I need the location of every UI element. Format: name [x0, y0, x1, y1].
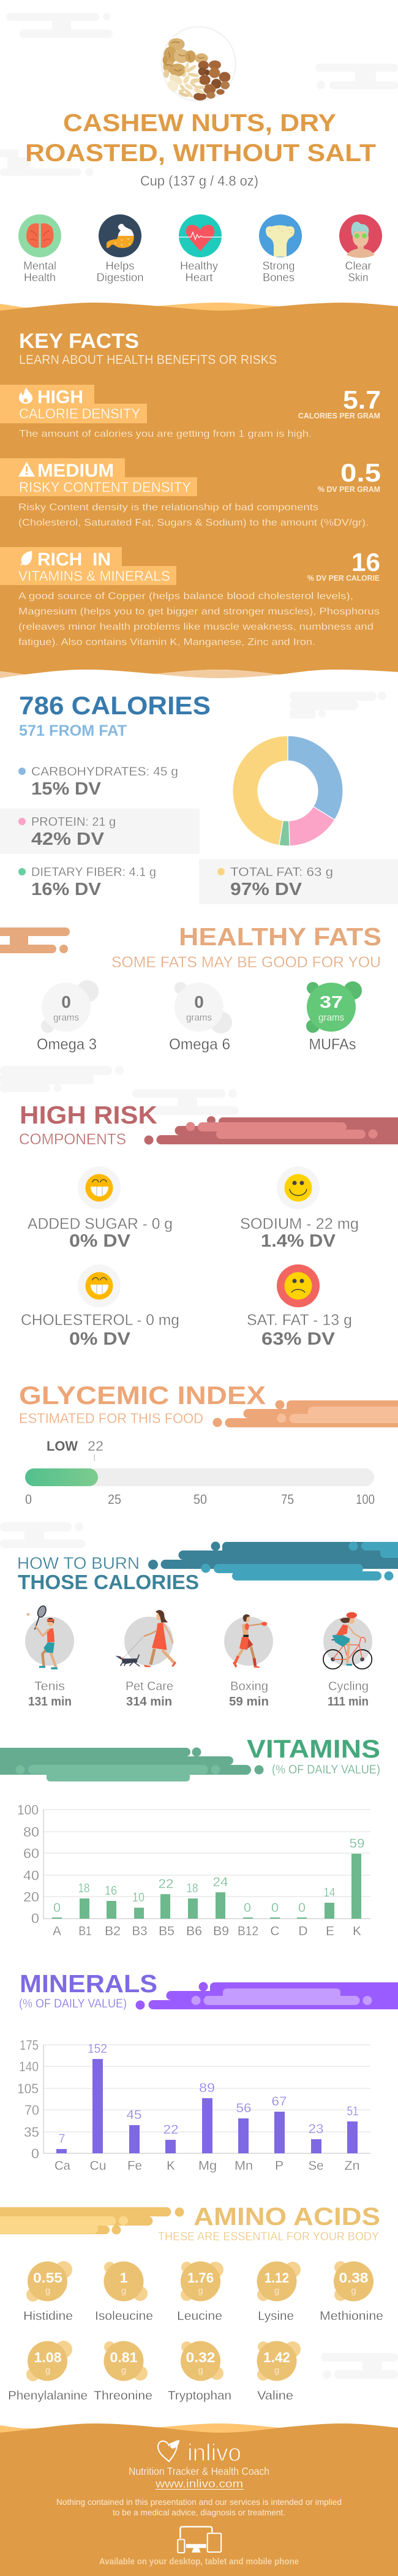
activity: boxing: [224, 1614, 273, 1709]
amino: threonine: [94, 2341, 152, 2403]
axis labels: [17, 1802, 39, 1926]
disclaimer: to be a medical advice, diagnosis or treatment.: [113, 2507, 285, 2517]
decorative clouds: high risk: [0, 1066, 239, 1115]
fact: rich in vitamins and minerals: A good source of Copper (helps balance blood cholesterol levels),: [18, 591, 353, 602]
fact: medium risky content density: MEDIUM: [37, 461, 114, 481]
panel: amino acids: [0, 2202, 383, 2403]
icon: mental health: Health: [24, 271, 56, 284]
panel: health benefits: [18, 214, 382, 284]
badge: MUFAs: [306, 981, 362, 1053]
badge: MUFAs: 37: [320, 992, 343, 1011]
value labels: 0: [244, 1901, 251, 1915]
legend: carbohydrates: 15% DV: [31, 779, 102, 799]
fact: high calorie density: 5.7: [343, 385, 381, 414]
axis labels: 35: [24, 2125, 39, 2140]
subheading: ESTIMATED FOR THIS FOOD: [19, 1410, 203, 1426]
category labels: K: [353, 1924, 361, 1938]
activity: cycling: [323, 1612, 372, 1709]
category labels: Fe: [127, 2159, 142, 2173]
cashews: [165, 73, 184, 94]
activity: boxing: Boxing: [230, 1680, 268, 1693]
fact: high calorie density: CALORIES PER GRAM: [298, 412, 380, 420]
category labels: B2: [105, 1924, 121, 1938]
amino: phenylalanine: [8, 2341, 88, 2403]
amino: histidine: 0.55: [33, 2270, 62, 2286]
icon: strong bones: Bones: [263, 271, 295, 284]
gauge axis: [25, 1492, 375, 1507]
disclaimer: Nothing contained in this presentation and our services is intended or implied: [56, 2497, 342, 2507]
value labels: 56: [236, 2101, 251, 2115]
fact: rich in vitamins and minerals: 16: [351, 548, 380, 576]
amino: leucine: 1.76: [187, 2270, 214, 2286]
category labels: [53, 1924, 361, 1938]
bar chart: vitamins: [17, 1802, 370, 1938]
category labels: B9: [213, 1924, 229, 1938]
heading: HOW TO BURN: [17, 1554, 140, 1573]
fact: rich in vitamins and minerals: Magnesium (helps you to get bigger and stronger muscles), Phosphorus: [18, 606, 380, 617]
gauge label: [47, 1438, 103, 1461]
component: saturated fat: [247, 1264, 352, 1349]
icon: devices: [178, 2527, 221, 2553]
fact: medium risky content density: RISKY CONTENT DENSITY: [19, 479, 191, 495]
subheading: COMPONENTS: [19, 1131, 126, 1148]
value labels: 0: [298, 1901, 306, 1915]
fact: medium risky content density: 0.5: [340, 458, 381, 487]
panel: vitamins: [0, 1734, 380, 1938]
amino: histidine: Histidine: [23, 2310, 73, 2323]
axis labels: 100: [17, 1802, 39, 1818]
header decoration: [0, 1747, 263, 1781]
heading: [17, 1554, 199, 1593]
badge: omega 3: Omega 3: [37, 1036, 97, 1053]
legend: dietary fiber: [18, 866, 156, 899]
amino: tryptophan: g: [198, 2365, 203, 2376]
logo: inlivo: [158, 2440, 241, 2466]
header decoration: [145, 1116, 398, 1144]
heading: GLYCEMIC INDEX: [19, 1381, 266, 1410]
axis labels: [17, 2038, 39, 2161]
heading: AMINO ACIDS: [193, 2202, 380, 2230]
component: cholesterol: CHOLESTEROL - 0 mg: [21, 1312, 179, 1329]
value labels: 18: [78, 1881, 89, 1895]
icon: strong bones: Strong: [262, 260, 295, 272]
heading: THOSE CALORIES: [18, 1571, 199, 1593]
amino: tryptophan: Tryptophan: [168, 2389, 231, 2403]
activity: tennis: Tenis: [34, 1680, 65, 1693]
hazelnuts: [193, 61, 230, 100]
legend: dietary fiber: 16% DV: [31, 880, 102, 899]
heading: VITAMINS: [247, 1734, 380, 1763]
value labels: [53, 1837, 365, 1915]
fact: rich in vitamins and minerals: [0, 547, 380, 648]
category labels: Cu: [89, 2159, 107, 2173]
fact: high calorie density: The amount of calories you are getting from 1 gram is high.: [19, 429, 312, 439]
icon: digestion: Helps: [105, 260, 135, 272]
amino: threonine: Threonine: [94, 2389, 152, 2403]
header decoration: [136, 1982, 398, 2009]
gauge axis: 50: [193, 1492, 207, 1507]
fact: high calorie density: HIGH: [37, 387, 83, 407]
panel: glycemic index: [19, 1381, 398, 1507]
legend: protein: [18, 815, 116, 849]
subheading: (% OF DAILY VALUE): [19, 1997, 127, 2011]
axis labels: 40: [23, 1868, 39, 1883]
amino: valine: Valine: [257, 2389, 293, 2403]
value labels: [59, 2042, 359, 2146]
amino: histidine: [23, 2261, 73, 2323]
grid: [43, 1810, 370, 1919]
pale nuts: [178, 62, 205, 99]
heading: HIGH RISK: [20, 1101, 157, 1129]
badge: omega 6: Omega 6: [169, 1036, 230, 1053]
availability note: Available on your desktop, tablet and mobile phone: [99, 2556, 299, 2567]
category labels: C: [270, 1924, 280, 1938]
value labels: 67: [272, 2094, 287, 2109]
value labels: 0: [271, 1901, 279, 1915]
panel: calories: [0, 691, 398, 904]
component: sodium: SODIUM - 22 mg: [240, 1215, 359, 1233]
component: added sugar: ADDED SUGAR - 0 g: [28, 1215, 173, 1233]
icon: healthy heart: [179, 214, 222, 284]
category labels: [54, 2159, 360, 2173]
heading: HEALTHY FATS: [179, 923, 381, 951]
amino: methionine: g: [351, 2286, 356, 2296]
website link: www.inlivo.com: [155, 2477, 243, 2490]
panel: footer: [0, 2423, 398, 2576]
title: ROASTED, WITHOUT SALT: [25, 140, 376, 167]
header decoration: [0, 2207, 184, 2235]
icon: warning triangle: [18, 462, 35, 477]
gauge axis: 25: [108, 1492, 121, 1507]
amino: methionine: Methionine: [320, 2310, 383, 2323]
activity: pet care: Pet Care: [126, 1680, 173, 1693]
heading: KEY FACTS: [19, 330, 139, 353]
value labels: 45: [126, 2108, 142, 2122]
value labels: 0: [53, 1901, 61, 1915]
serving size: Cup (137 g / 4.8 oz): [140, 173, 258, 189]
legend: carbohydrates: [18, 765, 178, 799]
badge: omega 3: grams: [53, 1013, 79, 1023]
band background: [0, 303, 398, 678]
subheading: (% OF DAILY VALUE): [272, 1763, 380, 1777]
value labels: 152: [88, 2042, 107, 2056]
component: added sugar: 0% DV: [69, 1231, 131, 1251]
amino: histidine: g: [45, 2286, 50, 2296]
amino: leucine: Leucine: [177, 2310, 222, 2323]
value labels: 7: [59, 2132, 65, 2146]
panel: minerals: [17, 1970, 398, 2173]
amino: isoleucine: g: [121, 2286, 126, 2296]
fact: rich in vitamins and minerals: VITAMINS & MINERALS: [18, 568, 170, 584]
subheading: SOME FATS MAY BE GOOD FOR YOU: [111, 954, 381, 971]
legend: total fat: [217, 866, 333, 899]
gauge axis: 75: [281, 1492, 294, 1507]
axis labels: 0: [31, 2146, 39, 2161]
axis labels: 70: [24, 2102, 39, 2118]
panel: healthy fats: [0, 923, 381, 1053]
axis labels: 80: [23, 1824, 39, 1840]
icon: digestion: [97, 214, 143, 284]
amino: valine: [257, 2341, 301, 2403]
amino: lysine: Lysine: [258, 2310, 294, 2323]
activity: tennis: 131 min: [28, 1695, 72, 1709]
category labels: B6: [186, 1924, 202, 1938]
gauge axis: 0: [25, 1492, 32, 1507]
gauge label: 22: [88, 1438, 103, 1454]
category labels: K: [167, 2159, 175, 2173]
legend: protein: 42% DV: [31, 829, 105, 849]
fact: rich in vitamins and minerals: RICH IN: [37, 550, 111, 570]
value labels: 22: [158, 1877, 174, 1891]
icon: clear skin: Clear: [345, 260, 372, 272]
category labels: Ca: [54, 2159, 70, 2173]
amino: lysine: 1.12: [265, 2270, 289, 2286]
component: sodium: 1.4% DV: [261, 1231, 336, 1251]
amino: valine: g: [274, 2365, 279, 2376]
axis labels: 0: [31, 1911, 39, 1926]
axis labels: 105: [17, 2081, 39, 2096]
amino: phenylalanine: 1.08: [34, 2349, 62, 2365]
header decoration: [148, 1541, 398, 1581]
amino: isoleucine: 1: [120, 2270, 128, 2286]
badge: omega 6: [169, 982, 232, 1053]
amino: valine: 1.42: [263, 2349, 290, 2365]
category labels: D: [298, 1924, 308, 1938]
amino: lysine: g: [274, 2286, 279, 2296]
badge: omega 6: grams: [186, 1013, 212, 1023]
axis labels: 20: [23, 1889, 39, 1905]
amino: lysine: [257, 2262, 301, 2323]
title: CASHEW NUTS, DRY: [63, 110, 336, 137]
axis labels: 175: [20, 2038, 39, 2053]
badge: omega 6: 0: [194, 992, 204, 1011]
activity: boxing: 59 min: [229, 1695, 269, 1709]
subheading: 571 FROM FAT: [19, 722, 127, 739]
gauge axis: 100: [356, 1492, 375, 1507]
legend: carbohydrates: CARBOHYDRATES: 45 g: [31, 765, 178, 779]
activity: cycling: Cycling: [328, 1680, 369, 1693]
walnut pieces: [163, 38, 208, 78]
fact: medium risky content density: [0, 458, 381, 528]
bars: [52, 1854, 361, 1919]
value labels: 24: [213, 1875, 228, 1889]
category labels: Zn: [344, 2159, 360, 2173]
bars: [56, 2059, 358, 2153]
category labels: Mg: [198, 2159, 217, 2173]
value labels: 18: [186, 1881, 198, 1895]
value labels: 89: [199, 2081, 215, 2095]
band background: [0, 2423, 398, 2576]
icon: clear skin: [339, 214, 382, 284]
legend: protein: PROTEIN: 21 g: [31, 815, 116, 829]
gauge bar: [25, 1468, 374, 1486]
decorative cloud: calories: [290, 692, 386, 719]
category labels: B5: [159, 1924, 175, 1938]
component: saturated fat: SAT. FAT - 13 g: [247, 1312, 352, 1329]
legend: total fat: 97% DV: [230, 880, 302, 899]
badge: MUFAs: MUFAs: [309, 1036, 356, 1053]
legend: dietary fiber: DIETARY FIBER: 4.1 g: [31, 866, 156, 879]
disclaimer: [56, 2497, 342, 2517]
subheading: THESE ARE ESSENTIAL FOR YOUR BODY: [158, 2230, 379, 2243]
category labels: B3: [132, 1924, 147, 1938]
value labels: 23: [309, 2122, 323, 2136]
amino: tryptophan: [168, 2341, 231, 2403]
category labels: E: [326, 1924, 334, 1938]
activity: tennis: [25, 1604, 74, 1709]
icon: digestion: Digestion: [97, 271, 143, 284]
amino: methionine: [320, 2261, 383, 2323]
icon: flame: [19, 388, 32, 404]
decorative cloud: burn: [0, 1522, 85, 1548]
amino: methionine: 0.38: [339, 2270, 369, 2286]
decorative cloud: amino: [321, 2353, 398, 2379]
amino: phenylalanine: g: [45, 2365, 50, 2376]
value labels: 10: [132, 1890, 145, 1905]
amino: leucine: g: [198, 2286, 203, 2296]
panel: how to burn: [17, 1541, 398, 1709]
amino: isoleucine: Isoleucine: [95, 2310, 153, 2323]
fact: high calorie density: CALORIE DENSITY: [19, 406, 140, 421]
food image: nuts: [162, 27, 236, 101]
category labels: Se: [309, 2159, 323, 2173]
component: added sugar: [28, 1166, 173, 1251]
component: cholesterol: 0% DV: [69, 1329, 131, 1349]
category labels: B1: [78, 1924, 92, 1938]
fact: rich in vitamins and minerals: (releaves minor health problems like muscle weakness, numbness and: [18, 622, 374, 632]
value labels: 51: [347, 2104, 359, 2118]
header decoration: [213, 1400, 398, 1427]
component: cholesterol: [21, 1264, 179, 1349]
amino: threonine: 0.81: [110, 2349, 138, 2365]
legend background panels: [0, 809, 398, 904]
panel: high risk: [19, 1101, 398, 1349]
decorative clouds: header: [0, 13, 398, 176]
heading: MINERALS: [20, 1970, 157, 1998]
gauge label: LOW: [47, 1438, 78, 1454]
fact: medium risky content density: % DV PER GRAM: [318, 485, 380, 494]
category labels: A: [53, 1924, 61, 1938]
badge: MUFAs: grams: [318, 1013, 344, 1023]
component: saturated fat: 63% DV: [261, 1329, 336, 1349]
fact: rich in vitamins and minerals: fatigue). Also contains Vitamin K, Manganese, Zinc and Iron.: [18, 637, 315, 648]
amino: phenylalanine: Phenylalanine: [8, 2389, 88, 2403]
fact: medium risky content density: Risky Content density is the relationship of bad components: [18, 502, 318, 513]
legend: total fat: TOTAL FAT: 63 g: [230, 866, 333, 879]
amino: leucine: [177, 2262, 223, 2323]
icon: mental health: [18, 214, 61, 284]
fact: medium risky content density: (Cholesterol, Saturated Fat, Sugars & Sodium) to the amount (%DV/gr).: [18, 518, 369, 528]
donut chart: [233, 736, 343, 846]
grid: [43, 2045, 370, 2153]
icon: strong bones: [259, 214, 302, 284]
icon: leaf: [20, 551, 32, 565]
logo: inlivo: inlivo: [187, 2440, 241, 2466]
axis labels: 140: [19, 2059, 39, 2074]
title: [25, 110, 376, 167]
icon: mental health: Mental: [23, 260, 56, 272]
icon: healthy heart: Healthy: [180, 260, 218, 272]
panel: key facts: [0, 303, 398, 678]
value labels: 59: [349, 1837, 365, 1851]
category labels: Mn: [235, 2159, 253, 2173]
icon: clear skin: Skin: [348, 271, 369, 284]
icon: healthy heart: Heart: [185, 271, 213, 284]
header decoration: [0, 927, 70, 953]
value labels: 16: [105, 1884, 117, 1898]
amino: isoleucine: [95, 2262, 153, 2323]
fact: rich in vitamins and minerals: % DV PER CALORIE: [307, 574, 380, 583]
component: sodium: [240, 1166, 359, 1251]
activity: pet care: 314 min: [126, 1695, 172, 1709]
amino: tryptophan: 0.32: [186, 2349, 216, 2365]
category labels: B12: [238, 1924, 258, 1938]
subheading: LEARN ABOUT HEALTH BENEFITS OR RISKS: [19, 353, 277, 367]
heading: 786 CALORIES: [19, 691, 211, 720]
fact: high calorie density: [0, 385, 381, 439]
badge: omega 3: [37, 980, 99, 1053]
category labels: P: [275, 2159, 283, 2173]
tagline: Nutrition Tracker & Health Coach: [129, 2465, 269, 2477]
value labels: 22: [163, 2123, 179, 2137]
activity: cycling: 111 min: [328, 1695, 369, 1709]
amino: threonine: g: [121, 2365, 126, 2376]
activity: pet care: [115, 1610, 176, 1709]
bar chart: minerals: [17, 2038, 370, 2173]
value labels: 14: [323, 1886, 336, 1900]
badge: omega 3: 0: [61, 992, 71, 1011]
axis labels: 60: [23, 1846, 39, 1861]
